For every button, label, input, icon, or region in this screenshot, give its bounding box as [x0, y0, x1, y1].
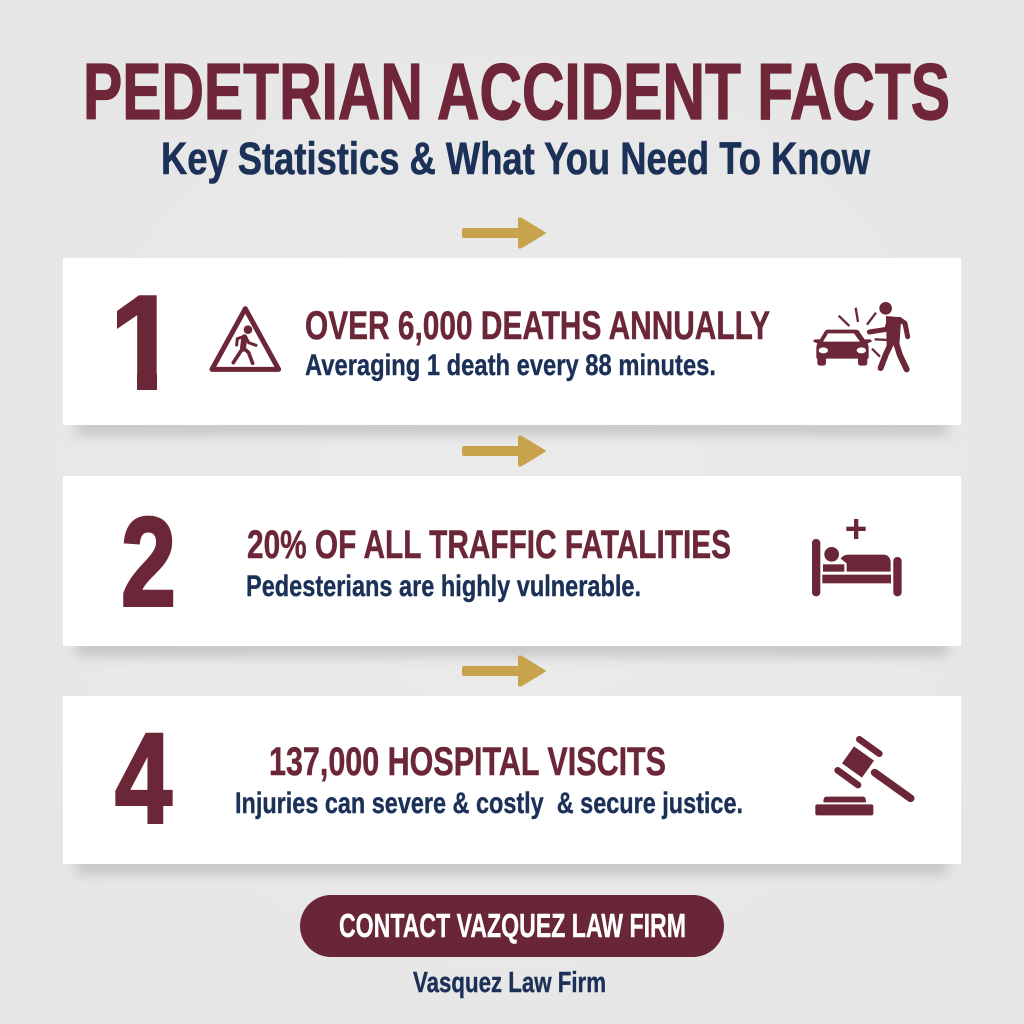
icon: car hitting pedestrian	[813, 302, 908, 369]
description: Pedesterians are highly vulnerable.	[246, 570, 641, 603]
icon: pedestrian warning triangle	[212, 309, 279, 369]
panel: stat 1	[63, 258, 961, 435]
heading: 137,000 HOSPITAL VISCITS	[269, 740, 666, 784]
description: Injuries can severe & costly & secure justice.	[235, 787, 743, 820]
subtitle: Key Statistics & What You Need To Know	[161, 133, 871, 184]
number 4: 4	[115, 708, 172, 850]
icon: hospital bed	[812, 519, 902, 596]
contact button	[300, 895, 724, 957]
heading: 20% OF ALL TRAFFIC FATALITIES	[247, 523, 731, 567]
heading: OVER 6,000 DEATHS ANNUALLY	[305, 304, 770, 348]
panel: stat 2	[63, 476, 961, 656]
panel: stat 4	[63, 696, 961, 874]
arrow 3	[462, 655, 546, 687]
contact button: CONTACT VAZQUEZ LAW FIRM	[339, 907, 686, 944]
number 1: 1	[110, 269, 178, 418]
arrow 2	[462, 435, 546, 467]
description: Averaging 1 death every 88 minutes.	[305, 349, 716, 382]
icon: gavel	[815, 739, 911, 815]
number 2: 2	[121, 492, 176, 632]
arrow 1	[462, 217, 546, 249]
footer firm name: Vasquez Law Firm	[413, 967, 606, 999]
